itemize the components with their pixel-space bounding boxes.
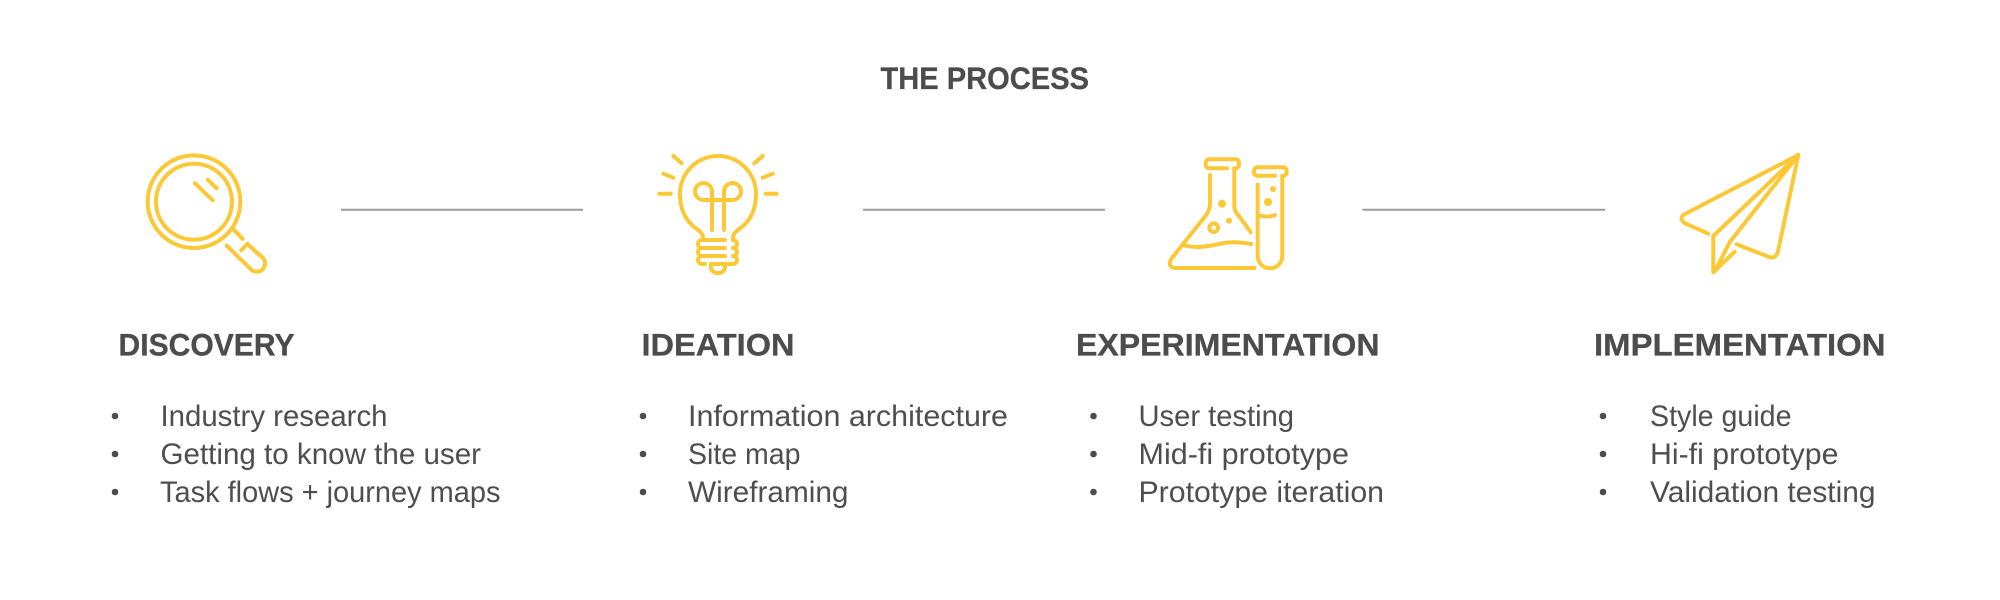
column: discovery [112, 326, 500, 509]
list: implementation items [1600, 400, 1876, 509]
column: implementation [1594, 326, 1886, 509]
icon: light bulb [659, 156, 777, 273]
list: discovery items [112, 400, 500, 509]
list: experimentation items: User testing [1138, 400, 1294, 433]
icon: flask and test tube [1170, 159, 1287, 268]
list: experimentation items: Mid-fi prototype [1138, 438, 1349, 471]
heading: ideation: IDEATION [642, 326, 794, 362]
column: experimentation [1076, 326, 1384, 509]
list: ideation items: Wireframing [688, 476, 848, 509]
icon: paper plane [1682, 155, 1798, 272]
icon: magnifying glass [148, 155, 265, 272]
connector line 1 [341, 209, 583, 211]
connector line 3 [1362, 209, 1605, 211]
list: ideation items: Site map [688, 438, 800, 471]
list: implementation items: Hi-fi prototype [1650, 438, 1838, 471]
list: implementation items: Style guide [1650, 400, 1792, 433]
heading: experimentation: EXPERIMENTATION [1076, 326, 1380, 362]
list: discovery items: Industry research [160, 400, 388, 433]
heading: implementation: IMPLEMENTATION [1594, 326, 1886, 362]
list: implementation items: Validation testing [1650, 476, 1876, 509]
list: discovery items: Getting to know the user [160, 438, 481, 471]
list: ideation items [640, 400, 1008, 509]
title: THE PROCESS [880, 60, 1089, 96]
list: discovery items: Task flows + journey maps [160, 476, 500, 509]
heading: discovery: DISCOVERY [118, 326, 294, 362]
column: ideation [640, 326, 1008, 509]
connector line 2 [863, 209, 1105, 211]
list: experimentation items: Prototype iteration [1138, 476, 1384, 509]
list: ideation items: Information architecture [688, 400, 1008, 433]
list: experimentation items [1090, 400, 1384, 509]
